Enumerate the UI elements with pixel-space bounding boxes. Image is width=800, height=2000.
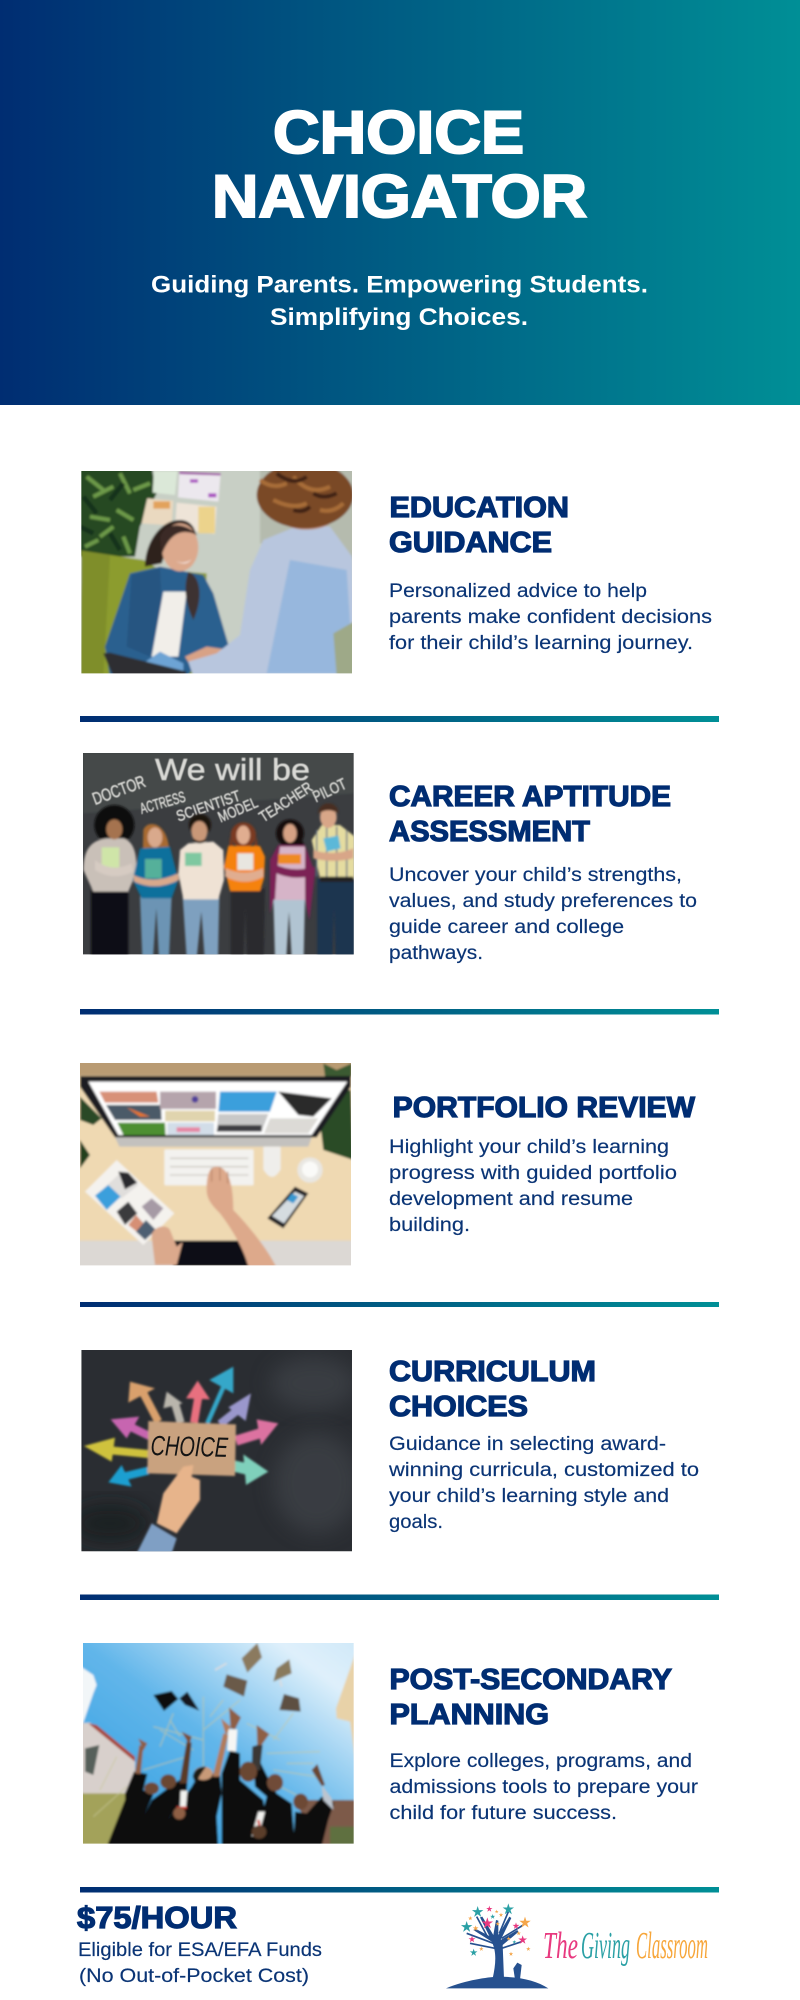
description: Guidance in selecting award-	[389, 1434, 666, 1455]
description: your child’s learning style and	[389, 1486, 669, 1507]
photo: counselor meeting	[77, 462, 357, 677]
funding note: Eligible for ESA/EFA Funds	[78, 1940, 322, 1961]
tagline	[151, 272, 648, 331]
heading: CAREER APTITUDE	[389, 781, 671, 813]
description: guide career and college	[389, 917, 624, 938]
tagline: Guiding Parents. Empowering Students.	[151, 272, 648, 298]
description	[389, 1137, 677, 1236]
funding note	[78, 1940, 322, 1987]
description: building.	[389, 1215, 470, 1236]
description: Uncover your child’s strengths,	[389, 865, 682, 886]
heading: CURRICULUM	[389, 1356, 596, 1388]
text: Classroom	[636, 1925, 708, 1967]
description: child for future success.	[390, 1803, 617, 1824]
header banner	[0, 0, 800, 405]
description	[389, 865, 697, 964]
funding note: (No Out-of-Pocket Cost)	[79, 1966, 309, 1987]
photo: graduates tossing caps	[78, 1638, 358, 1848]
panel: portfolio review	[75, 1058, 695, 1268]
description: development and resume	[389, 1189, 633, 1210]
photo: students before chalkboard	[78, 748, 358, 958]
heading: PORTFOLIO REVIEW	[393, 1092, 695, 1124]
heading	[389, 781, 671, 848]
photo: students before chalkboard: DOCTOR	[90, 771, 148, 809]
photo: choice sign with chalk arrows	[70, 1350, 360, 1553]
photo: students before chalkboard: PILOT	[311, 776, 350, 806]
logo: The Giving Classroom	[446, 1903, 708, 1988]
description: winning curricula, customized to	[388, 1460, 699, 1481]
photo: students before chalkboard: TEACHER	[256, 779, 316, 826]
description: Personalized advice to help	[389, 581, 647, 602]
wordmark: The	[543, 1925, 578, 1967]
description	[389, 581, 712, 654]
description: progress with guided portfolio	[389, 1163, 677, 1184]
description	[388, 1434, 699, 1533]
tagline: Simplifying Choices.	[270, 304, 528, 331]
photo: students before chalkboard: We will be	[155, 753, 310, 787]
title	[212, 99, 587, 230]
description: Explore colleges, programs, and	[390, 1751, 692, 1772]
description: for their child’s learning journey.	[389, 633, 693, 654]
description: pathways.	[389, 943, 483, 964]
description: admissions tools to prepare your	[390, 1777, 699, 1798]
icon: star tree	[446, 1903, 548, 1988]
photo: students before chalkboard: ACTRESS	[138, 789, 188, 818]
heading: PLANNING	[390, 1699, 549, 1731]
wordmark: Giving	[581, 1925, 630, 1967]
title: CHOICE	[273, 99, 524, 166]
heading	[389, 492, 569, 559]
heading: POST-SECONDARY	[390, 1664, 672, 1696]
title: NAVIGATOR	[212, 163, 587, 230]
wordmark	[543, 1925, 708, 1967]
photo: desk with computer and tablet	[75, 1058, 355, 1268]
panel: career aptitude assessment	[78, 748, 697, 964]
price heading: $75/HOUR	[77, 1901, 237, 1935]
panel: post-secondary planning	[78, 1638, 699, 1848]
description: parents make confident decisions	[389, 607, 712, 628]
price block	[77, 1901, 322, 1987]
photo: students before chalkboard: MODEL	[216, 794, 261, 826]
panel: education guidance	[77, 462, 712, 677]
description: values, and study preferences to	[389, 891, 697, 912]
sign text: CHOICE	[150, 1430, 229, 1463]
heading	[389, 1356, 596, 1423]
description: Highlight your child’s learning	[389, 1137, 669, 1158]
heading	[390, 1664, 672, 1731]
photo: students before chalkboard: SCIENTIST	[174, 787, 243, 825]
heading: GUIDANCE	[389, 527, 552, 559]
heading: EDUCATION	[390, 492, 569, 524]
description: goals.	[389, 1512, 443, 1533]
heading: CHOICES	[389, 1391, 528, 1423]
panel: curriculum choices	[70, 1350, 699, 1553]
heading: ASSESSMENT	[389, 816, 591, 848]
description	[390, 1751, 699, 1824]
